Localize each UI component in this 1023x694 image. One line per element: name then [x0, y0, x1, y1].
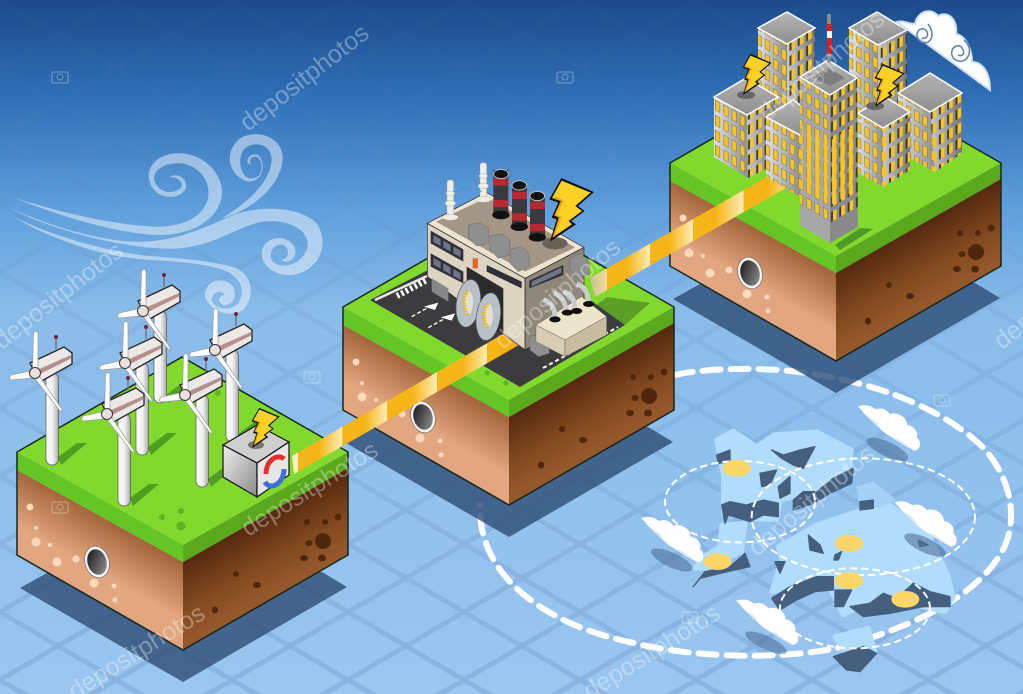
city buildings [714, 12, 962, 250]
turbine 5 [159, 353, 237, 487]
clouds [635, 397, 965, 646]
wind swirls [8, 134, 323, 314]
energy band from converter to plant [292, 327, 519, 474]
icon: lightning bolt [252, 408, 280, 448]
icon: lightning bolt left [737, 54, 771, 99]
smoke stacks [492, 169, 546, 242]
roof vents [468, 223, 589, 357]
roof [427, 192, 584, 278]
left wall [427, 223, 525, 350]
camera icons [52, 72, 950, 623]
building: back right [849, 12, 907, 125]
transformer [536, 284, 607, 357]
continents light [695, 431, 953, 652]
icon: conversion arrows [265, 457, 284, 486]
insulators [442, 163, 491, 220]
right wall [525, 247, 584, 350]
door [467, 267, 503, 335]
panel: power plant ground block [343, 212, 674, 537]
watermarks: depositphotos [753, 5, 890, 127]
building: far right [898, 73, 962, 172]
roof inner [436, 197, 575, 272]
panel: wind farm ground block [17, 357, 348, 682]
watermarks: depositphotos [234, 19, 374, 137]
ground shadows [835, 228, 873, 250]
continents dark [693, 447, 950, 672]
turbine 1 [9, 331, 87, 465]
watermarks: depositphotos [236, 436, 383, 542]
windows [431, 231, 563, 302]
turbine 6 [81, 372, 159, 506]
panel: city ground block [670, 68, 1001, 393]
wind turbines [9, 269, 267, 506]
watermarks: depositphotos [743, 440, 880, 562]
grass details [159, 390, 221, 530]
watermarks: depositphotos [489, 233, 626, 355]
building: right front [858, 97, 910, 187]
intake discs [453, 278, 504, 342]
turbine 4 [189, 308, 267, 442]
building: back left [758, 12, 815, 125]
converter box [223, 408, 289, 497]
cloud with spirals [897, 11, 990, 90]
building: middle [766, 100, 815, 197]
route ellipses [665, 458, 975, 648]
road [370, 270, 650, 387]
energy band from plant to city [590, 158, 800, 297]
large dashed route [480, 369, 1011, 656]
hub markers [704, 460, 919, 608]
power plant [412, 163, 607, 357]
tower [800, 14, 858, 243]
icon: lightning bolt [542, 178, 594, 249]
icon: lightning bolt right [866, 64, 905, 110]
world map [635, 397, 975, 672]
antenna [827, 14, 832, 62]
turbine 3 [99, 321, 177, 455]
turbine 2 [117, 269, 195, 403]
building: left [714, 78, 778, 178]
road arrows [412, 303, 455, 328]
cloud shadows [648, 433, 949, 658]
